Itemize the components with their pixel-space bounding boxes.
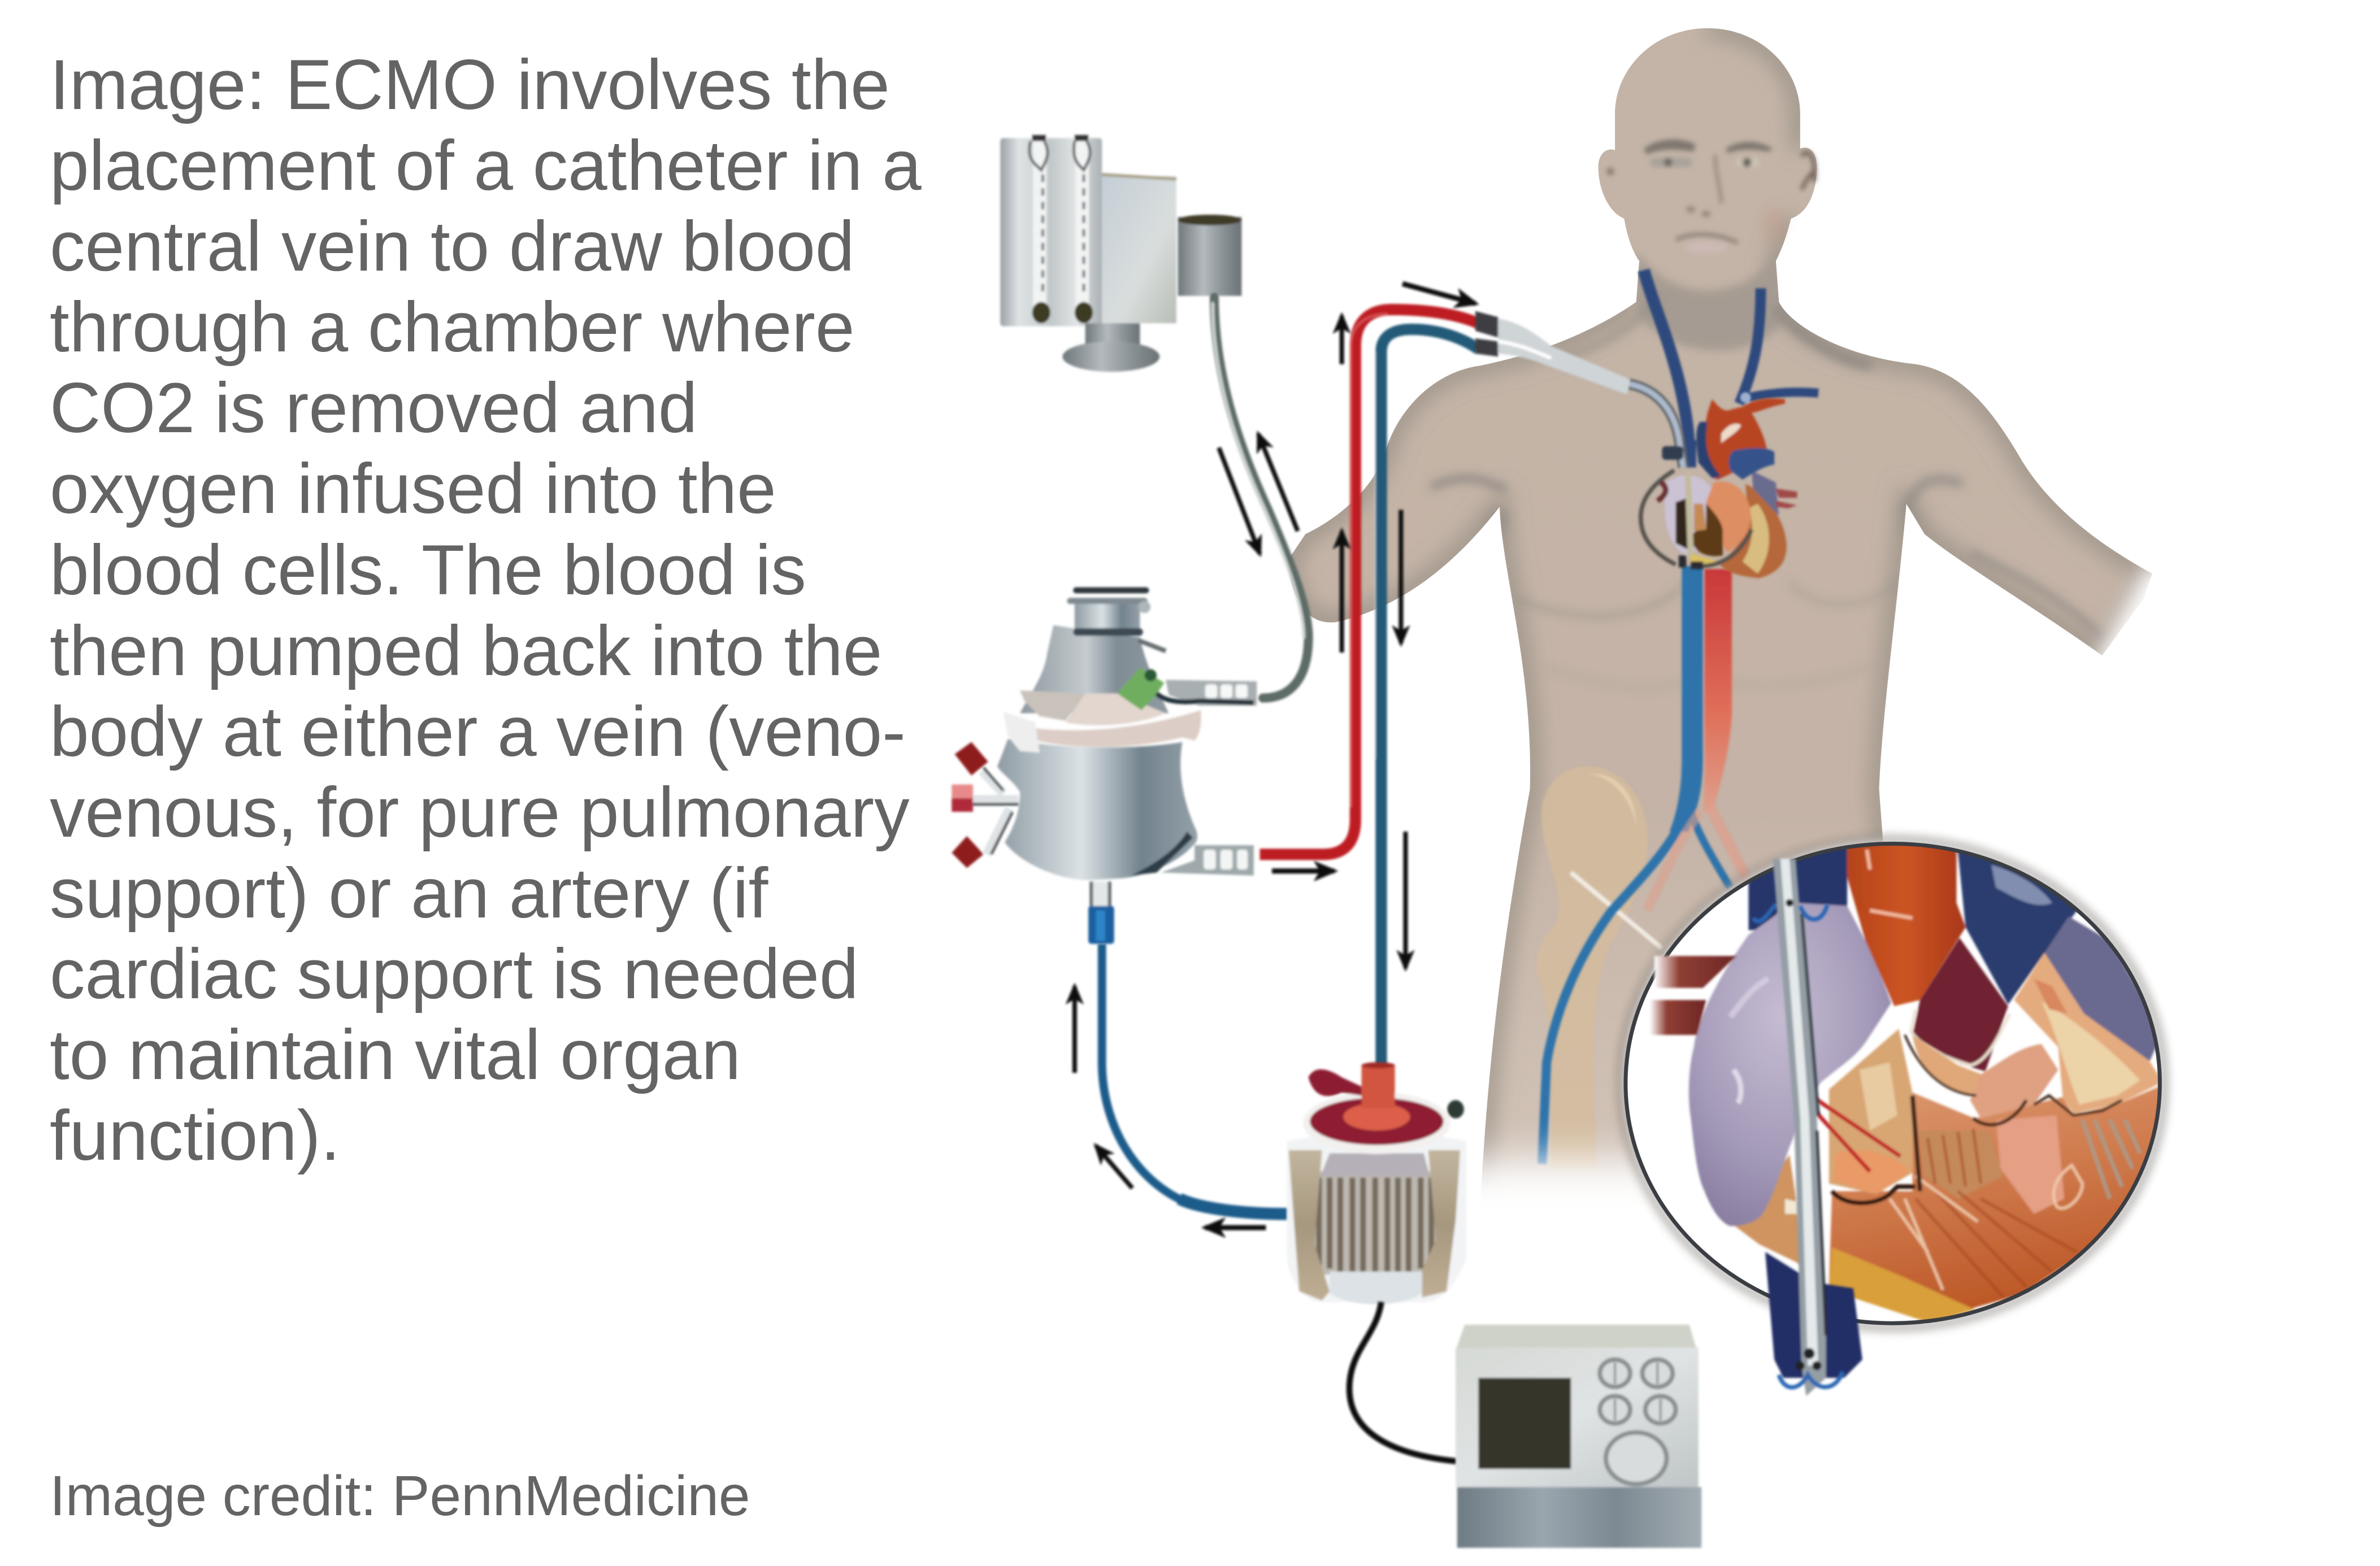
left ports (973, 771, 1018, 854)
arrow: blue down upper (1400, 510, 1402, 643)
oxygenator neck and clamps (1075, 602, 1140, 636)
white tab (1004, 712, 1040, 752)
salmon cream muscle upper right (2014, 953, 2163, 1114)
pump posts (1289, 1150, 1330, 1300)
superior vena cava (1687, 440, 1692, 467)
magnified lens: catheter in the heart (1621, 834, 2164, 1328)
bottom coupling (1161, 845, 1254, 876)
right heart lower (1719, 484, 1787, 578)
arrow: top red up (1341, 316, 1343, 364)
upper heart (1701, 398, 1785, 480)
oxygenator cone (1020, 625, 1169, 713)
muscle mass (1829, 1085, 2163, 1320)
pump top (1303, 1092, 1450, 1154)
heart (1628, 384, 1797, 578)
arrow: blue return up (1074, 986, 1075, 1073)
neck shading (1636, 250, 1788, 351)
top coupling (1166, 680, 1257, 706)
oxygenator body (997, 739, 1197, 880)
description text: Image: ECMO involves the placement of a catheter in a central vein to draw blood through a chamber where CO2 is removed and oxygen infused into the blood cells. The blood is then pumped back into the body at either a vein (veno- venous, for pure pulmonary support) or an artery (if cardiac support is needed to maintain vital organ function). (50, 46, 922, 1175)
grey ribbed fibres right (2082, 1120, 2140, 1199)
venous blue tube to pump (1375, 329, 1478, 1065)
tan leaflet zone (1829, 1029, 1913, 1194)
pump fins (1313, 1172, 1436, 1274)
arrow: return curve (1096, 1146, 1132, 1188)
monitor buttons (1600, 1360, 1676, 1484)
white fades (1427, 562, 2216, 1328)
ring around heart (1641, 471, 1752, 566)
centrifugal pump (1287, 1062, 1466, 1304)
oxygen blender (1000, 135, 1176, 372)
neck and central vessels (1542, 270, 1818, 1164)
striated central muscle (1920, 1130, 2004, 1199)
illustration: ECMO circuit connected to patient (949, 28, 2174, 1550)
guidewire in red (1806, 1093, 1900, 1172)
left ventricle (1706, 481, 1751, 553)
hip bone (1536, 766, 1662, 1168)
central catheter (1628, 384, 1683, 467)
arrow: hose down (1219, 447, 1260, 554)
face (1607, 140, 1814, 254)
navy vessel backdrop (1748, 834, 1847, 930)
arrow: from pump (1205, 1226, 1266, 1229)
oxygenator (952, 588, 1257, 944)
monitor screen (1478, 1378, 1571, 1469)
orange artery (1847, 838, 1966, 1006)
body connector (1475, 311, 1630, 394)
arrow: from oxygenator (1272, 870, 1334, 872)
purple atrium (1689, 903, 1891, 1226)
vena cava in blue (1670, 566, 1703, 832)
pump control cable (1349, 1302, 1457, 1461)
inferior vena cava and catheter (1753, 859, 1862, 1396)
bottom outlet (1090, 882, 1111, 906)
control monitor (1456, 1325, 1701, 1548)
arrow: hose up (1258, 434, 1298, 531)
green clip (1117, 668, 1164, 710)
arterial red tube (1260, 310, 1478, 854)
aorta in red (1703, 569, 1732, 812)
image credit: Image credit: PennMedicine (50, 1464, 750, 1528)
lens outline (1626, 843, 2160, 1323)
flow arrows (1075, 284, 1475, 1228)
patient body (1275, 15, 2170, 1229)
right purple atrium (2044, 916, 2163, 1062)
yellow fat (1829, 1247, 1975, 1323)
oxygenator beige disc (1035, 710, 1201, 747)
gas canister (1178, 215, 1241, 296)
arrow: lower red up (1341, 531, 1343, 652)
blue return tube (1102, 944, 1287, 1214)
gas hose (1213, 297, 1309, 698)
lower left tan (1735, 1155, 1806, 1267)
muscle shading (1427, 305, 2103, 638)
monitor base (1457, 1487, 1701, 1548)
brown vessel stubs (1650, 956, 1736, 1035)
arrow: toward body (1402, 284, 1475, 303)
arrow: blue down lower (1405, 832, 1406, 968)
purple left atrium and ring side (1665, 475, 1712, 555)
